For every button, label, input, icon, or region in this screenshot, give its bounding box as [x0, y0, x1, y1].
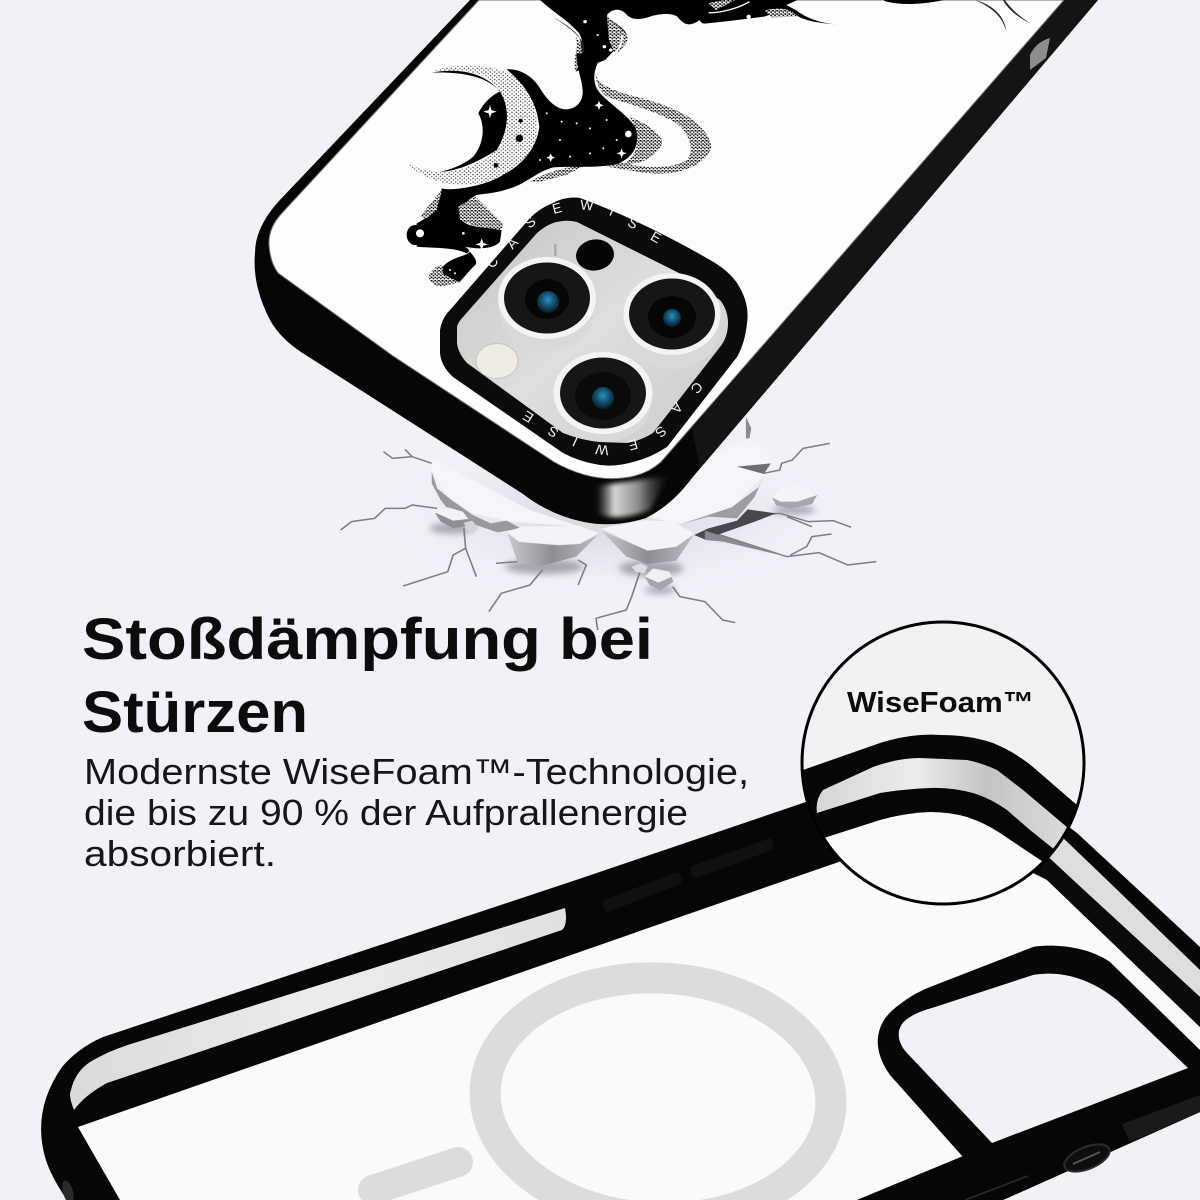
heading	[82, 607, 653, 745]
camera ring lettering: E	[550, 199, 564, 217]
microphone and lidar	[554, 237, 616, 273]
tendril stipple	[428, 265, 460, 287]
camera cutout	[899, 974, 1188, 1143]
magnified clear panel	[825, 812, 1042, 902]
body text: absorbiert.	[84, 833, 276, 874]
corner port	[60, 1179, 76, 1200]
camera ring lettering: S	[625, 214, 641, 232]
bumper glare	[596, 476, 668, 517]
camera ring lettering: A	[503, 234, 521, 252]
camera ring lettering	[483, 197, 706, 459]
right edge tone	[692, 0, 1098, 468]
camera ring lettering: A	[667, 399, 686, 417]
right plate	[644, 417, 776, 539]
lens top left	[498, 257, 596, 351]
stippled river banks	[420, 190, 503, 230]
camera ring lettering: C	[483, 253, 501, 271]
magsafe pill	[373, 1162, 458, 1190]
river body	[417, 53, 637, 253]
lens right	[624, 273, 720, 369]
camera ring lettering: E	[648, 228, 664, 246]
camera ring lettering: S	[652, 423, 670, 441]
heading: Stoßdämpfung bei	[82, 607, 653, 672]
camera ring lettering: S	[545, 423, 561, 441]
illustration: top wisps	[538, 0, 1031, 72]
case silhouette	[41, 759, 1200, 1200]
camera ring lettering: I	[570, 434, 580, 450]
magnified foam	[816, 758, 1067, 848]
camera ring lettering: E	[520, 408, 536, 426]
center right chunk	[601, 520, 694, 564]
magnified bumper	[804, 734, 1076, 862]
camera ring lettering: W	[580, 197, 595, 213]
bottom band	[857, 1065, 1200, 1200]
magnifier callout: WiseFoam	[800, 620, 1086, 906]
magsafe ring	[373, 969, 837, 1200]
camera cutout frame	[878, 946, 1200, 1157]
bottom band texture	[1122, 1095, 1200, 1142]
chunk shadows	[430, 505, 816, 594]
side button	[1030, 38, 1050, 70]
camera plate	[457, 221, 728, 443]
camera ring lettering: I	[607, 203, 617, 219]
lower phone case	[41, 759, 1200, 1200]
volume buttons	[603, 838, 774, 912]
camera bumper ring	[440, 198, 748, 466]
stippled ripple	[530, 166, 583, 182]
clear interior	[78, 826, 1200, 1200]
callout label: WiseFoam™	[847, 687, 1034, 719]
heading: Stürzen	[82, 680, 308, 745]
camera ring lettering: E	[626, 436, 640, 454]
side button	[965, 1176, 1028, 1200]
flash	[476, 344, 518, 378]
speaker port	[1061, 1139, 1113, 1177]
left blob of river	[407, 225, 423, 245]
river stars and dots	[416, 101, 632, 274]
camera ring lettering: W	[594, 441, 609, 459]
tendril	[442, 252, 476, 282]
foam channel left	[70, 908, 566, 1110]
camera ring lettering: S	[521, 213, 539, 231]
crack lines	[341, 443, 876, 630]
lower pebbles	[632, 563, 673, 591]
stippled bulge	[623, 117, 662, 164]
lens bottom	[554, 352, 652, 442]
stippled moon	[408, 65, 537, 185]
inner frame right	[1005, 840, 1200, 1027]
back panel	[269, 0, 1064, 479]
small left chunk	[435, 507, 479, 533]
left plate	[432, 458, 580, 532]
center left chunk	[507, 526, 598, 566]
case bumper	[255, 0, 1098, 524]
camera ring lettering: C	[688, 379, 706, 397]
moon craters	[494, 102, 538, 168]
stippled swirl	[595, 73, 712, 174]
body text: Modernste WiseFoam™-Technologie,	[84, 751, 749, 792]
illustration: ink river and crescent moon	[407, 53, 712, 287]
foam channel right	[1030, 835, 1200, 997]
right pebble	[772, 485, 817, 509]
ground cracks	[341, 417, 876, 630]
right lower plate	[705, 531, 787, 557]
body text	[84, 751, 749, 874]
body text: die bis zu 90 % der Aufprallenergie	[84, 792, 688, 833]
top phone with case	[255, 0, 1098, 524]
inner crescent	[432, 71, 507, 172]
